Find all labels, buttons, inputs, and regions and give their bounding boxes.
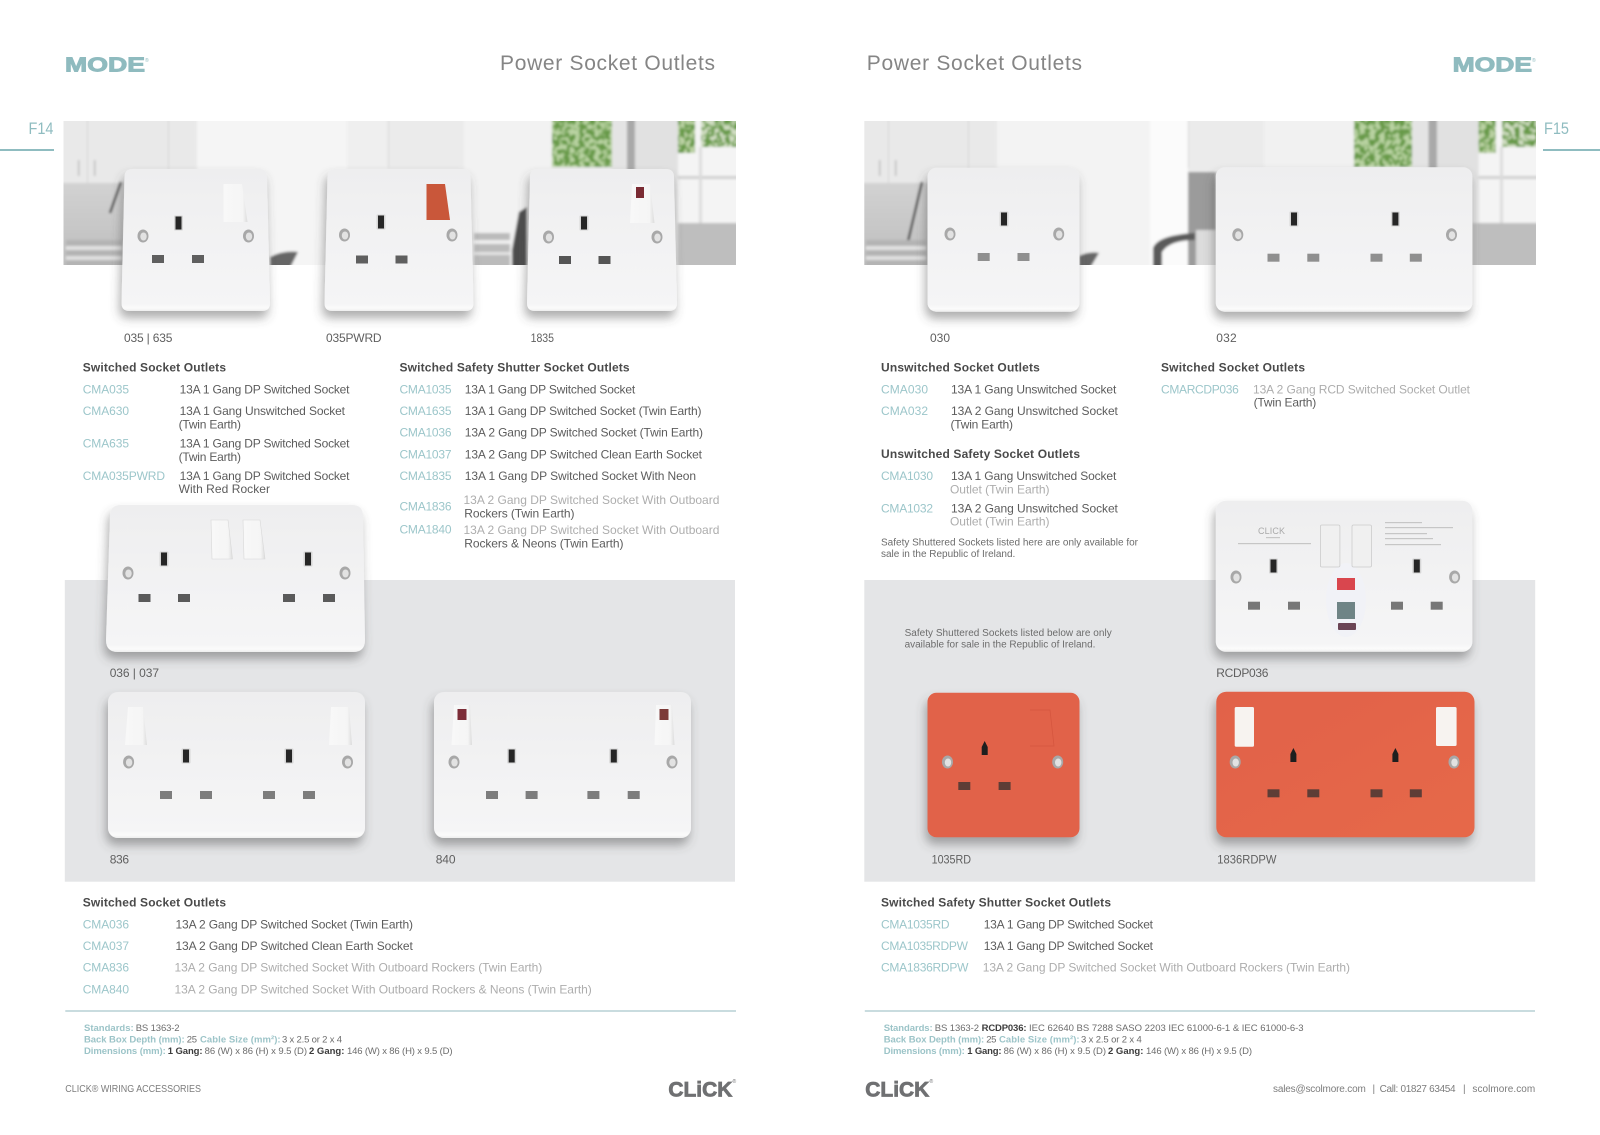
back box and cable line: Back Box Depth (mm): (84, 1035, 185, 1046)
row CMA1037: 13A 2 Gang DP Switched Clean Earth Socket (465, 447, 703, 461)
standards line: RCDP036: (982, 1023, 1026, 1034)
availability note (881, 538, 1139, 560)
row CMA1030: 13A 1 Gang Unswitched Socket (951, 469, 1117, 483)
row CMA032 (881, 404, 1119, 432)
list: switched socket outlets (2 gang) (83, 896, 592, 996)
label 1035RD: 1035RD (932, 853, 971, 867)
heading: Switched Safety Shutter Socket Outlets (400, 360, 630, 374)
availability note in panel: Safety Shuttered Sockets listed below are only (905, 628, 1112, 639)
list: switched safety shutter socket outlets (red) (881, 896, 1350, 975)
heading: Switched Socket Outlets (83, 360, 226, 374)
row CMA635: (Twin Earth) (179, 450, 241, 464)
dimensions line: 86 (W) x 86 (H) x 9.5 (D) (1004, 1046, 1106, 1057)
row CMA032: CMA032 (881, 404, 928, 418)
row CMA037: CMA037 (83, 939, 129, 953)
back box and cable line: 25 (986, 1035, 996, 1046)
row CMA1035: 13A 1 Gang DP Switched Socket (465, 382, 636, 396)
socket 840 with neons (434, 692, 691, 838)
row CMA1035RDPW (881, 939, 1154, 953)
socket 032 (1216, 167, 1472, 312)
list: switched socket outlets (83, 360, 350, 496)
logo: MODE: ® (1532, 57, 1536, 64)
row CMA1836RDPW: CMA1836RDPW (881, 961, 969, 975)
standards line: Standards: (84, 1023, 134, 1034)
row CMA836: CMA836 (83, 961, 129, 975)
row CMA1835: 13A 1 Gang DP Switched Socket With Neon (465, 469, 696, 483)
availability note in panel (905, 628, 1112, 650)
page number tab F15: F15 (1544, 119, 1569, 138)
row CMA036: CMA036 (83, 917, 129, 931)
row CMA1836: Rockers (Twin Earth) (464, 506, 574, 520)
grey product panel (864, 580, 1535, 882)
logo: CLICK: CLiCK (865, 1078, 929, 1102)
row CMA035: 13A 1 Gang DP Switched Socket (180, 382, 350, 396)
back box and cable line: 3 x 2.5 or 2 x 4 (1081, 1035, 1142, 1046)
footer text: CLICK® WIRING ACCESSORIES (65, 1084, 201, 1095)
label 1836RDPW: 1836RDPW (1217, 853, 1277, 867)
standards line: BS 1363-2 (136, 1023, 180, 1034)
availability note: Safety Shuttered Sockets listed here are only available for (881, 538, 1139, 549)
dimensions line: 1 Gang: (967, 1046, 1002, 1057)
specifications block (84, 1023, 452, 1057)
socket 1835 with neon (527, 169, 677, 311)
heading: Unswitched Safety Socket Outlets (881, 447, 1080, 461)
dimensions line: 146 (W) x 86 (H) x 9.5 (D) (347, 1046, 452, 1057)
back box and cable line: Cable Size (mm²): (200, 1035, 281, 1046)
footer contact details: Call: 01827 63454 (1380, 1084, 1456, 1095)
row CMA1835: CMA1835 (400, 469, 452, 483)
back box and cable line: Cable Size (mm²): (999, 1035, 1080, 1046)
row CMARCDP036: CMARCDP036 (1161, 382, 1239, 396)
socket 030 (928, 168, 1080, 312)
row CMA630: (Twin Earth) (179, 418, 241, 432)
hero room photo (860, 118, 1540, 268)
socket RCDP036 (1216, 501, 1472, 652)
row CMA630: 13A 1 Gang Unswitched Socket (180, 404, 346, 418)
socket 036 | 037 (106, 505, 365, 652)
row CMA1635: 13A 1 Gang DP Switched Socket (Twin Earth) (465, 404, 702, 418)
row CMA1836: CMA1836 (400, 500, 452, 514)
page number tab F15 (1543, 119, 1600, 151)
socket RCDP036: CLICK (1258, 526, 1285, 536)
row CMA1035RD (881, 917, 1154, 931)
row CMA1840: 13A 2 Gang DP Switched Socket With Outboard (464, 523, 719, 537)
logo: CLICK: CLiCK (668, 1078, 732, 1102)
back box and cable line (84, 1035, 342, 1046)
dimensions line: 146 (W) x 86 (H) x 9.5 (D) (1146, 1046, 1252, 1057)
row CMA1840 (400, 523, 719, 550)
row CMA1032: Outlet (Twin Earth) (950, 515, 1050, 529)
row CMARCDP036 (1161, 382, 1471, 410)
page title: Power Socket Outlets (500, 52, 715, 75)
socket 836 (108, 692, 365, 838)
page F14 (0, 52, 740, 1102)
back box and cable line (884, 1035, 1142, 1046)
row CMA1035RD: 13A 1 Gang DP Switched Socket (984, 917, 1154, 931)
row CMA1836 (400, 493, 719, 520)
product labels row: 1835 (531, 331, 554, 345)
back box and cable line: 25 (187, 1035, 197, 1046)
dimensions line: Dimensions (mm): (84, 1046, 166, 1057)
footer contact details: scolmore.com (1472, 1084, 1535, 1095)
row CMA630 (83, 404, 346, 432)
standards line: IEC 62640 BS 7288 SASO 2203 IEC 61000-6-1 & IEC 61000-6-3 (1029, 1023, 1304, 1034)
row CMA035PWRD: 13A 1 Gang DP Switched Socket (180, 469, 350, 483)
label 840: 840 (436, 853, 456, 867)
heading: Switched Safety Shutter Socket Outlets (881, 896, 1111, 910)
standards line (884, 1023, 1304, 1034)
row CMA1032: CMA1032 (881, 501, 933, 515)
availability note: sale in the Republic of Ireland. (881, 549, 1015, 560)
back box and cable line: Back Box Depth (mm): (884, 1035, 984, 1046)
product labels row: 030 (930, 331, 950, 345)
row CMA840: CMA840 (83, 982, 129, 996)
page number tab F14 (0, 119, 54, 151)
row CMA1030: Outlet (Twin Earth) (950, 482, 1050, 496)
label 836: 836 (110, 853, 129, 867)
row CMA1036: 13A 2 Gang DP Switched Socket (Twin Earth) (465, 426, 703, 440)
row CMA032: 13A 2 Gang Unswitched Socket (951, 404, 1119, 418)
row CMA1635: CMA1635 (400, 404, 452, 418)
specifications block (884, 1023, 1304, 1057)
row CMA1035RDPW: 13A 1 Gang DP Switched Socket (984, 939, 1154, 953)
socket 1836RDPW red (1216, 692, 1474, 837)
page F15 (860, 52, 1600, 1102)
row CMARCDP036: 13A 2 Gang RCD Switched Socket Outlet (1253, 382, 1471, 396)
back box and cable line: 3 x 2.5 or 2 x 4 (282, 1035, 342, 1046)
dimensions line (84, 1046, 452, 1057)
socket 1035RD red (928, 693, 1080, 837)
row CMA036: 13A 2 Gang DP Switched Socket (Twin Earth) (176, 917, 413, 931)
row CMA030: CMA030 (881, 382, 928, 396)
standards line (84, 1023, 180, 1034)
row CMA032: (Twin Earth) (950, 418, 1013, 432)
row CMA635: CMA635 (83, 436, 129, 450)
list: unswitched safety socket outlets (881, 447, 1139, 560)
row CMA030: 13A 1 Gang Unswitched Socket (951, 382, 1117, 396)
page title: Power Socket Outlets (867, 52, 1082, 75)
row CMA836: 13A 2 Gang DP Switched Socket With Outboard Rockers (Twin Earth) (174, 961, 542, 975)
row CMA1840: CMA1840 (400, 523, 452, 537)
dimensions line: Dimensions (mm): (884, 1046, 965, 1057)
socket 035 | 635 (122, 169, 270, 311)
row CMA1037: CMA1037 (400, 447, 452, 461)
row CMA1840: Rockers & Neons (Twin Earth) (464, 536, 624, 550)
row CMA1030: CMA1030 (881, 469, 933, 483)
standards line: Standards: (884, 1023, 933, 1034)
socket 035PWRD with red rocker (324, 169, 474, 311)
row CMA1836RDPW: 13A 2 Gang DP Switched Socket With Outboard Rockers (Twin Earth) (983, 961, 1350, 975)
row CMA037: 13A 2 Gang DP Switched Clean Earth Socket (176, 939, 413, 953)
dimensions line: 2 Gang: (309, 1046, 344, 1057)
heading: Switched Socket Outlets (83, 896, 226, 910)
product labels row: 035PWRD (326, 331, 382, 345)
row CMA1035RD: CMA1035RD (881, 917, 950, 931)
row CMA1036: CMA1036 (400, 426, 452, 440)
row CMA035PWRD: With Red Rocker (179, 482, 270, 496)
footer contact details (1273, 1084, 1535, 1095)
product labels row (124, 331, 554, 345)
product labels row: 032 (1216, 331, 1237, 345)
logo: CLICK: ® (732, 1078, 736, 1085)
product labels row (930, 331, 1237, 345)
footer contact details: | (1372, 1084, 1375, 1095)
list: switched socket outlets RCD (1161, 360, 1471, 410)
row CMARCDP036: (Twin Earth) (1254, 396, 1316, 410)
footer contact details: | (1463, 1084, 1466, 1095)
row CMA035PWRD (83, 469, 350, 496)
grey product panel (65, 580, 735, 882)
dimensions line: 1 Gang: (168, 1046, 202, 1057)
logo: MODE: ® (145, 57, 149, 64)
list: switched safety shutter socket outlets (400, 360, 719, 550)
product labels row: 035 | 635 (124, 331, 173, 345)
logo: CLICK: ® (930, 1078, 934, 1085)
dimensions line: 2 Gang: (1108, 1046, 1143, 1057)
logo: MODE: MODE (1453, 55, 1532, 77)
row CMA630: CMA630 (83, 404, 129, 418)
logo: MODE: MODE (65, 55, 145, 77)
row CMA635: 13A 1 Gang DP Switched Socket (180, 436, 350, 450)
hero room photo (60, 118, 740, 268)
row CMA1035: CMA1035 (400, 382, 452, 396)
row CMA1030 (881, 469, 1117, 496)
row CMA1032: 13A 2 Gang Unswitched Socket (951, 501, 1119, 515)
row CMA1035RDPW: CMA1035RDPW (881, 939, 969, 953)
label 036 | 037: 036 | 037 (110, 666, 159, 680)
list: unswitched socket outlets (881, 360, 1119, 432)
dimensions line (884, 1046, 1252, 1057)
footer contact details: sales@scolmore.com (1273, 1084, 1366, 1095)
heading: Switched Socket Outlets (1161, 360, 1305, 374)
row CMA840: 13A 2 Gang DP Switched Socket With Outboard Rockers & Neons (Twin Earth) (174, 982, 592, 996)
row CMA1836: 13A 2 Gang DP Switched Socket With Outboard (464, 493, 719, 507)
row CMA035 (83, 382, 350, 396)
row CMA1032 (881, 501, 1119, 529)
heading: Unswitched Socket Outlets (881, 360, 1040, 374)
row CMA635 (83, 436, 350, 464)
page number tab F14: F14 (28, 119, 54, 138)
row CMA035PWRD: CMA035PWRD (83, 469, 165, 483)
row CMA035: CMA035 (83, 382, 129, 396)
availability note in panel: available for sale in the Republic of Ireland. (905, 639, 1095, 650)
dimensions line: 86 (W) x 86 (H) x 9.5 (D) (205, 1046, 307, 1057)
standards line: BS 1363-2 (935, 1023, 979, 1034)
label RCDP036: RCDP036 (1216, 666, 1269, 680)
